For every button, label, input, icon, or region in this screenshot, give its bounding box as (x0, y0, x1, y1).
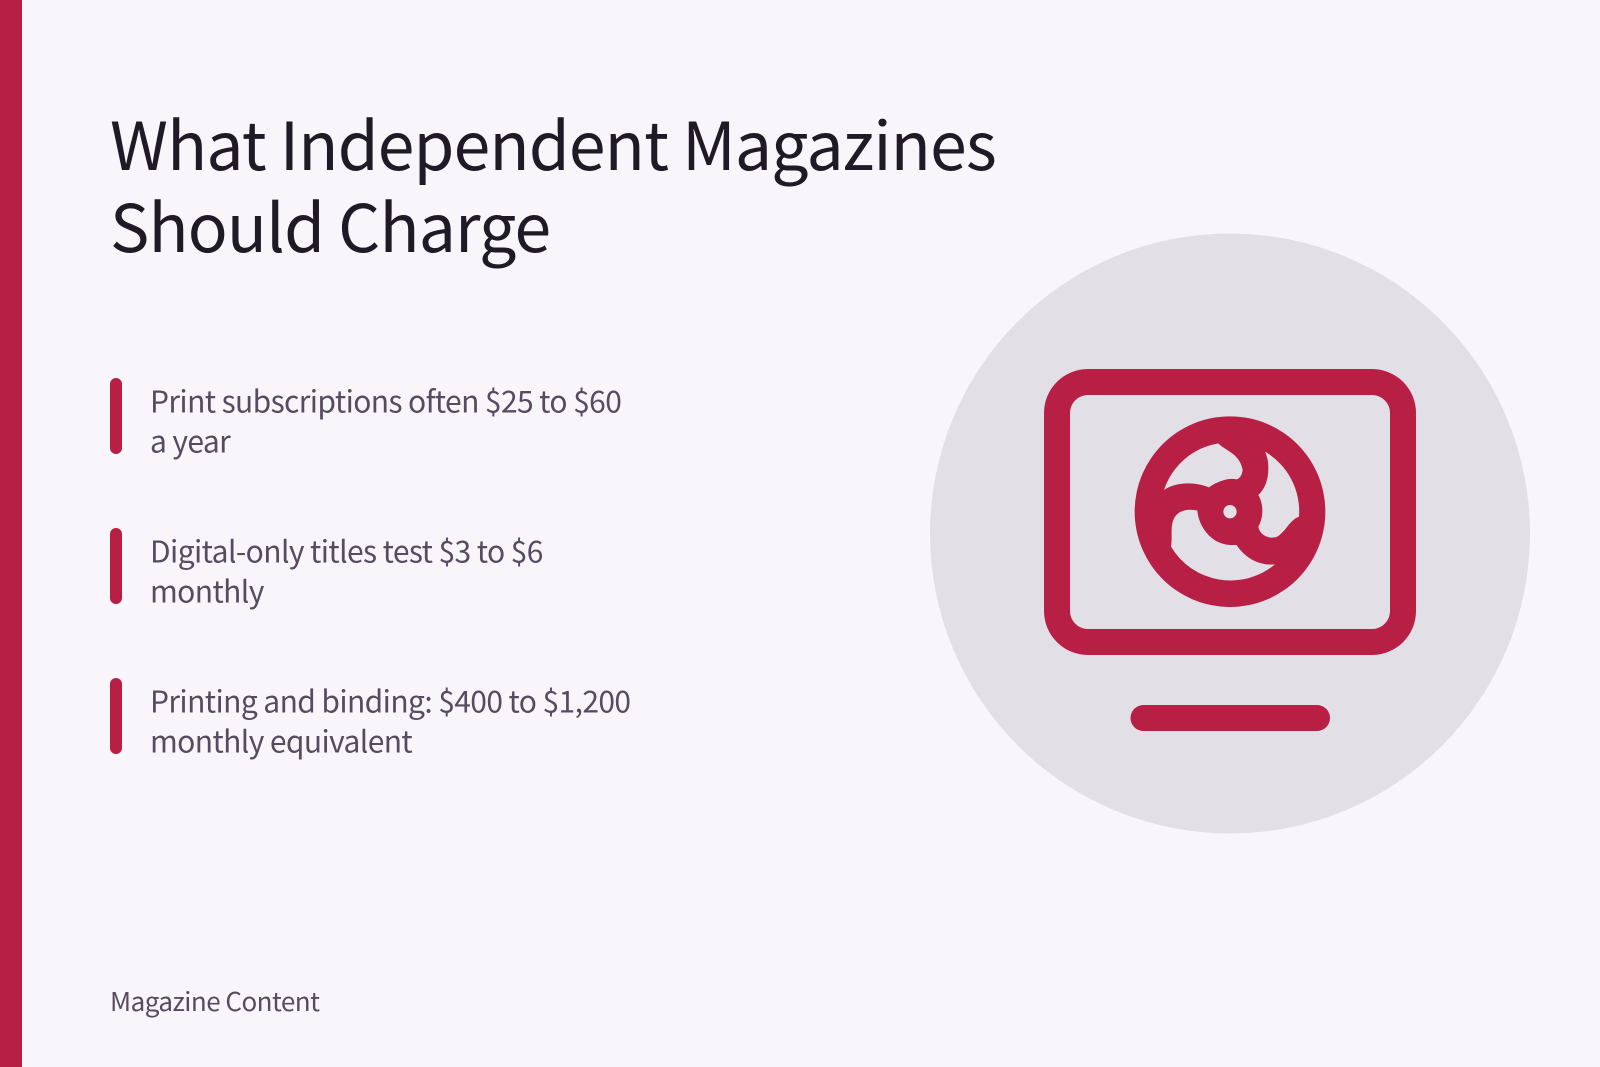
bullet list (110, 378, 630, 762)
monitor stand (1130, 705, 1330, 731)
bullet 1: a year (150, 418, 231, 462)
footer label: Magazine Content (110, 982, 320, 1019)
bullet 1: Print subscriptions often $25 to $60 (150, 378, 621, 422)
fan wheel (1135, 416, 1325, 607)
bullet 2 (110, 528, 543, 612)
title: Should Charge (110, 176, 550, 272)
title: What Independent Magazines (110, 94, 996, 190)
bullet 3 (110, 678, 630, 762)
bullet 2: monthly (150, 568, 265, 612)
monitor frame (1057, 382, 1403, 642)
title (110, 94, 996, 272)
bullet 3: monthly equivalent (150, 718, 412, 762)
icon background circle (930, 234, 1530, 834)
bullet 1 (110, 378, 621, 462)
left accent bar (0, 0, 22, 1067)
bullet 2: Digital-only titles test $3 to $6 (150, 528, 543, 572)
bullet 3: Printing and binding: $400 to $1,200 (150, 678, 630, 722)
icon: monitor with fan in circle (930, 234, 1530, 834)
